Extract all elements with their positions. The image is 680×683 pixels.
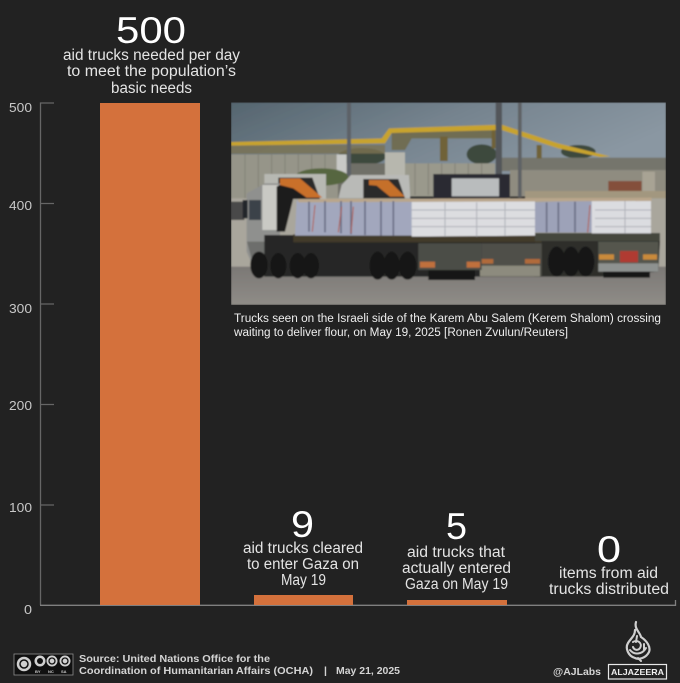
callout: 0 items distributed xyxy=(549,529,669,598)
conveyor truss xyxy=(231,145,385,154)
source text: | xyxy=(324,665,327,677)
callout: 0 items distributed: trucks distributed xyxy=(549,581,669,598)
callout: 5 trucks entered: 5 xyxy=(446,506,467,547)
callout: 500 trucks needed: aid trucks needed per day xyxy=(63,47,240,64)
x axis xyxy=(40,600,676,605)
callout: 5 trucks entered xyxy=(402,506,511,593)
callout: 500 trucks needed: basic needs xyxy=(111,80,192,97)
trees xyxy=(338,144,596,165)
photo: aid trucks at crossing xyxy=(231,102,666,305)
y axis labels: 100 xyxy=(9,501,32,515)
second cab frame xyxy=(338,175,410,198)
bar: 500 trucks needed xyxy=(100,103,200,605)
callout: 9 trucks cleared xyxy=(243,504,363,589)
icon: creative commons licence: BY xyxy=(35,669,41,674)
source text: May 21, 2025 xyxy=(336,665,400,677)
y axis xyxy=(40,103,54,605)
handle: @AJLabs xyxy=(553,666,601,678)
callout: 500 trucks needed: 500 xyxy=(116,10,186,51)
callout: 5 trucks entered: aid trucks that xyxy=(407,544,506,561)
sky xyxy=(231,102,666,176)
icon: creative commons licence: NC xyxy=(48,669,54,674)
icon: creative commons licence: SA xyxy=(61,669,67,674)
callout: 0 items distributed: 0 xyxy=(597,529,621,570)
chassis xyxy=(264,235,542,277)
y axis labels: 300 xyxy=(9,302,32,316)
lights and plate xyxy=(620,251,638,262)
road xyxy=(231,267,666,305)
bush xyxy=(295,168,348,186)
yellow conveyor xyxy=(231,125,610,157)
callout: 500 trucks needed: to meet the population’s xyxy=(67,63,236,80)
callout: 5 trucks entered: Gaza on May 19 xyxy=(405,576,508,593)
y axis labels xyxy=(9,101,32,617)
callout: 9 trucks cleared: to enter Gaza on xyxy=(247,556,359,573)
y axis labels: 400 xyxy=(9,199,32,213)
source text: Source: United Nations Office for the xyxy=(79,653,270,665)
callout: 500 trucks needed xyxy=(63,10,240,97)
icon: Al Jazeera flame logo xyxy=(627,622,650,661)
bar: 9 trucks cleared xyxy=(254,595,353,605)
photo caption: Trucks seen on the Israeli side of the Karem Abu Salem (Kerem Shalom) crossing xyxy=(234,313,661,325)
bar chart xyxy=(9,101,676,617)
y axis labels: 200 xyxy=(9,399,32,413)
logo: Al Jazeera wordmark xyxy=(608,664,666,679)
y axis labels: 500 xyxy=(9,101,32,115)
third cab xyxy=(433,174,510,199)
first cab xyxy=(246,182,281,260)
cargo: flour sacks xyxy=(295,199,415,236)
photo caption xyxy=(233,313,661,339)
callout: 5 trucks entered: actually entered xyxy=(402,560,511,577)
source text: Coordination of Humanitarian Affairs (OCHA) xyxy=(79,665,313,677)
callout: 9 trucks cleared: 9 xyxy=(291,504,314,545)
source text xyxy=(79,653,400,677)
concrete walls xyxy=(231,154,338,199)
cranes xyxy=(277,178,305,232)
logo: Al Jazeera wordmark: ALJAZEERA xyxy=(611,667,664,677)
first cab crane frame xyxy=(264,174,326,199)
callout: 9 trucks cleared: aid trucks cleared xyxy=(243,540,363,557)
callout: 9 trucks cleared: May 19 xyxy=(281,572,326,589)
bar: 5 trucks entered xyxy=(407,600,507,605)
ground xyxy=(231,198,666,268)
callout: 0 items distributed: items from aid xyxy=(559,565,658,582)
photo caption: waiting to deliver flour, on May 19, 2025 [Ronen Zvulun/Reuters] xyxy=(233,327,568,339)
wheels xyxy=(250,247,650,280)
poles xyxy=(347,102,351,176)
y axis labels: 0 xyxy=(24,603,32,617)
icon: creative commons licence xyxy=(14,654,73,675)
